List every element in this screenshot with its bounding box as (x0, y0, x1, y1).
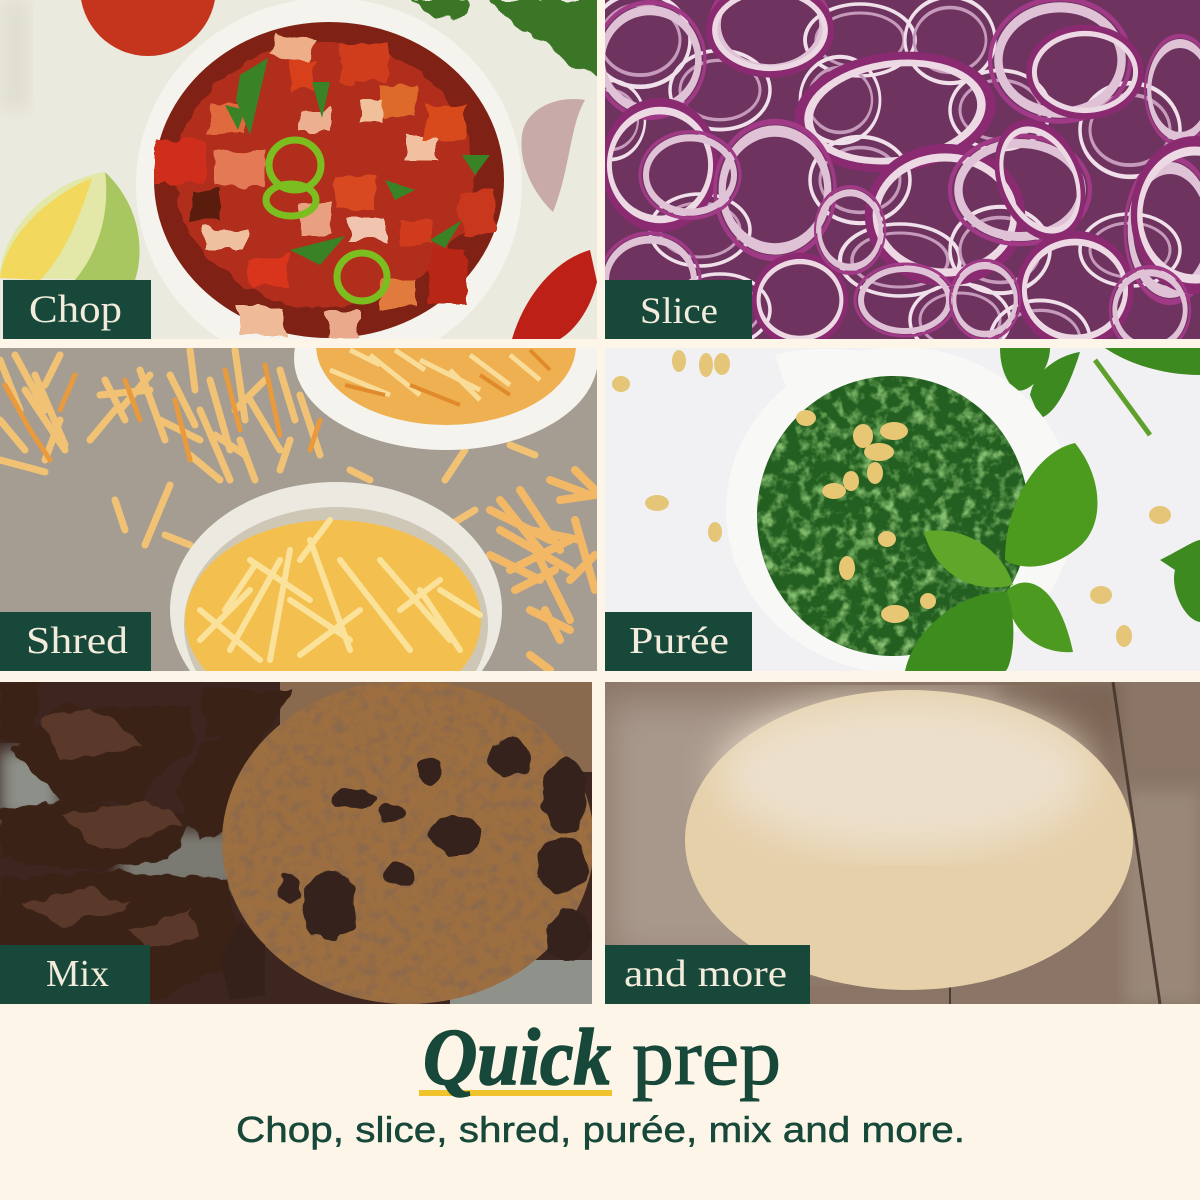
icon: red chili (512, 250, 597, 339)
icon: green chili rings (266, 140, 387, 301)
label: Mix: Mix (46, 953, 109, 995)
icon: chocolate chunk (240, 938, 265, 998)
label: Puree: Purée (629, 620, 729, 662)
icon: basil leaves (905, 443, 1098, 671)
panel: and more (605, 682, 1200, 1004)
panel: slice (605, 0, 1200, 339)
label: Shred: Shred (26, 620, 128, 662)
icon: parsley (410, 0, 600, 78)
title underline (419, 1090, 612, 1096)
icon: cookie (222, 680, 594, 1004)
chocolate pieces (0, 682, 290, 1004)
label: Puree (605, 612, 752, 671)
label: Mix (0, 945, 150, 1004)
icon: garlic (521, 99, 585, 212)
panel: shred (0, 348, 597, 671)
panel: mix (0, 680, 594, 1004)
icon: herb sprig (1000, 348, 1200, 622)
icon: salsa bowl (136, 0, 522, 372)
icon: pine nuts (612, 350, 1171, 647)
label: Shred (0, 612, 151, 671)
label: Chop: Chop (29, 288, 122, 331)
icon: dough ball (685, 690, 1133, 990)
panel: chop (0, 0, 600, 372)
icon: upper cheese bowl (294, 348, 597, 450)
label: and more (605, 945, 810, 1004)
icon: lime wedge (0, 172, 140, 280)
subtitle: Chop, slice, shred, purée, mix and more. (236, 1109, 965, 1150)
icon: pesto bowl (757, 376, 1043, 656)
panel: puree (605, 347, 1200, 673)
label: Chop (3, 280, 151, 339)
label: Slice (605, 280, 752, 339)
scattered cheese shreds (0, 350, 535, 545)
title (419, 1014, 781, 1102)
title: prep (632, 1014, 781, 1102)
label: and more: and more (624, 953, 787, 995)
title: Quick (423, 1014, 611, 1102)
icon: lower cheese bowl (170, 482, 502, 671)
icon: tomato (80, 0, 216, 56)
label: Slice: Slice (640, 291, 718, 332)
